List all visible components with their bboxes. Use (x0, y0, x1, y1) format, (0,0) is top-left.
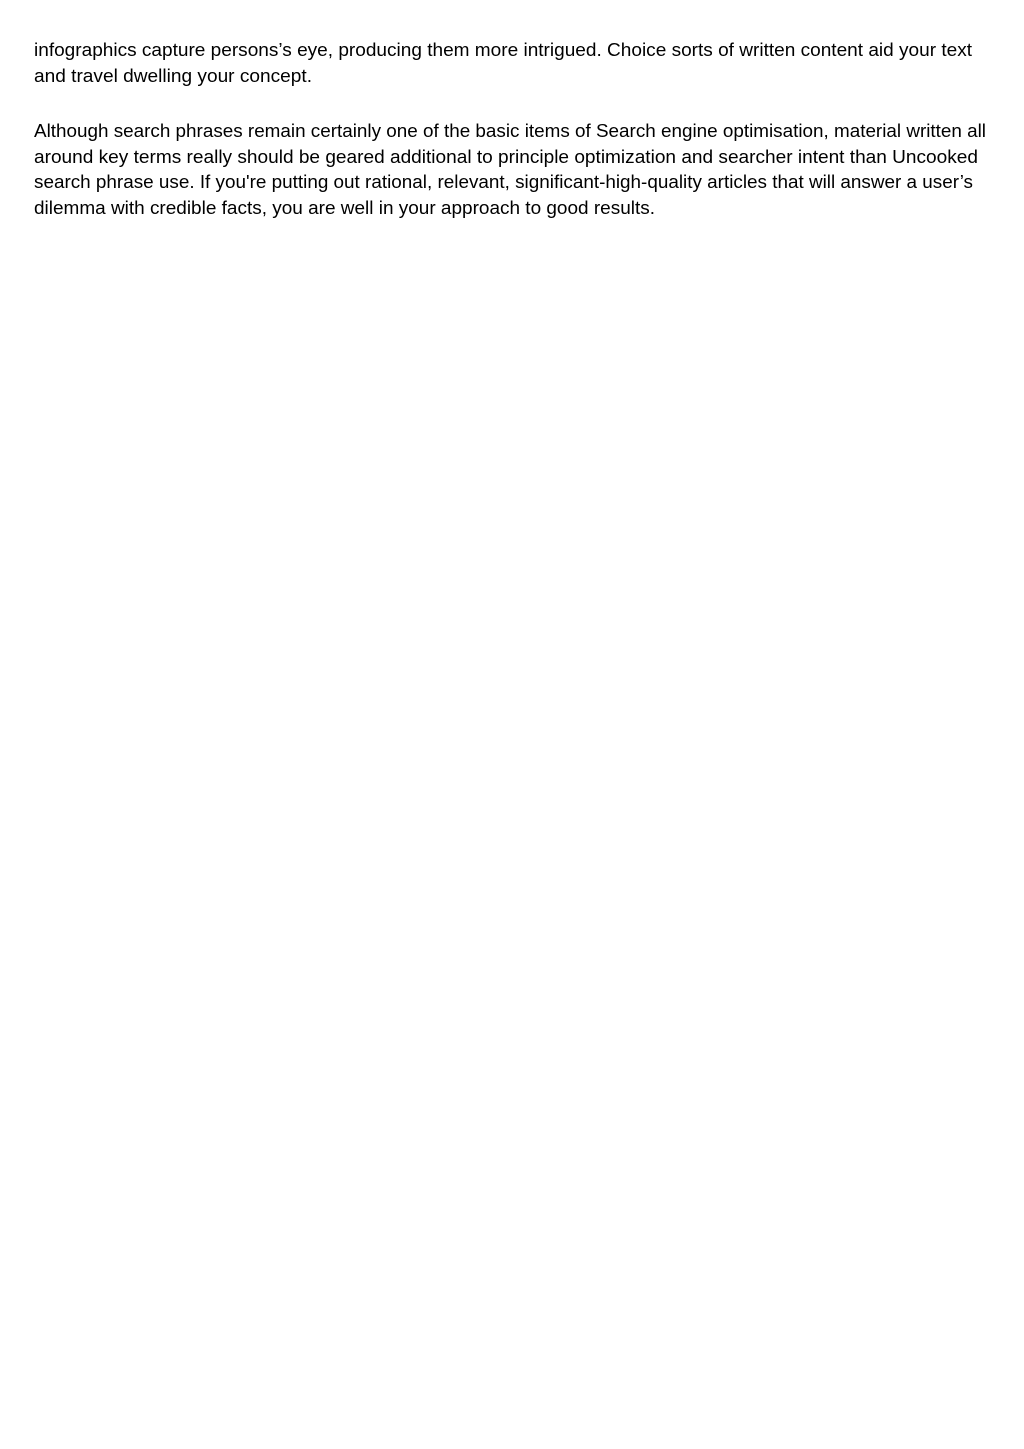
text block: second paragraph: dilemma with credible facts, you are well in your approach to good results. (34, 197, 655, 218)
text block: opening paragraph: infographics capture persons’s eye, producing them more intrigued. Choice sorts of written content aid your text (34, 39, 972, 60)
text block: second paragraph: search phrase use. If you're putting out rational, relevant, significant-high-quality articles that will answer a user’s (34, 171, 973, 192)
text block: opening paragraph: and travel dwelling your concept. (34, 65, 312, 86)
text block: second paragraph: Although search phrases remain certainly one of the basic items of Search engine optimisation, material written all (34, 120, 986, 141)
text block: opening paragraph (34, 39, 972, 86)
text block: second paragraph: around key terms really should be geared additional to principle optimization and searcher intent than Uncooked (34, 146, 978, 167)
text block: second paragraph (34, 120, 986, 218)
